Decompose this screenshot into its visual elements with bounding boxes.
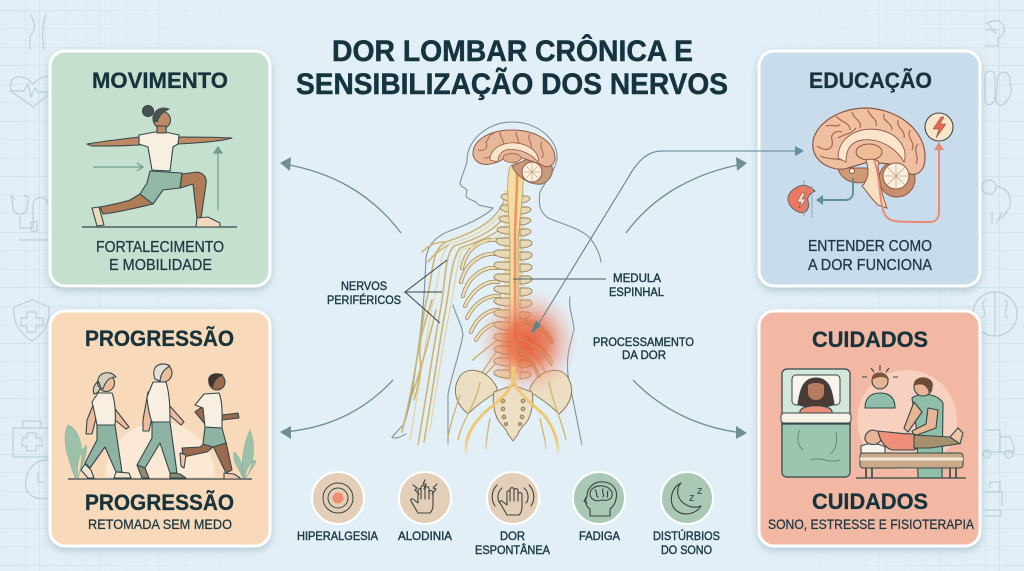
symptom: hiperalgesia: HIPERALGESIA (297, 531, 378, 543)
symptom: alodinia (398, 472, 452, 543)
spinal cord (508, 163, 523, 372)
icon: concentric target (312, 472, 364, 524)
illustration: sleep and physiotherapy (781, 365, 966, 478)
label: processamento da dor (593, 337, 694, 362)
illustration: brain and pain pathways (788, 108, 953, 222)
arrow: to movimento (280, 157, 401, 233)
pelvis (455, 370, 572, 441)
symptom: dor espontânea: ESPONTÂNEA (475, 544, 550, 557)
caption: educação (808, 238, 932, 274)
panel: cuidados (759, 311, 980, 546)
label: nervos periféricos (327, 260, 447, 323)
label: nervos periféricos: PERIFÉRICOS (327, 294, 401, 307)
peripheral nerves (402, 192, 553, 445)
title: DOR LOMBAR CRÔNICA E (332, 34, 693, 68)
sacral nerves (466, 368, 558, 452)
symptom: distúrbios do sono: DISTÚRBIOS (653, 530, 720, 543)
nerves in glow (515, 321, 552, 378)
arrow: to progressão (280, 380, 393, 439)
caption: cuidados (768, 489, 975, 532)
label: medula espinhal: ESPINHAL (609, 287, 665, 299)
label: nervos periféricos: NERVOS (341, 281, 387, 293)
heading: cuidados: CUIDADOS (812, 327, 928, 352)
title (296, 34, 728, 101)
symptom: distúrbios do sono: DO SONO (661, 545, 712, 557)
panel: progressão (50, 311, 270, 546)
caption: educação: ENTENDER COMO (808, 238, 932, 255)
icon: moon and zzz (661, 472, 713, 524)
heading: educação: EDUCAÇÃO (809, 68, 932, 93)
brain (473, 130, 555, 184)
icon: moon and zzz: z (697, 485, 702, 497)
arrow: to cuidados (633, 380, 747, 439)
heading: progressão: PROGRESSÃO (85, 326, 234, 351)
symptom: dor espontânea: DOR (500, 531, 525, 543)
caption: progressão: RETOMADA SEM MEDO (88, 516, 232, 532)
icon: moon and zzz: z (689, 492, 694, 504)
spinal column (504, 190, 524, 380)
symptom: hiperalgesia (297, 472, 378, 543)
ribs (461, 240, 552, 342)
caption: movimento: FORTALECIMENTO (96, 239, 224, 256)
symptom: alodinia: ALODINIA (398, 531, 452, 543)
title: SENSIBILIZAÇÃO DOS NERVOS (296, 67, 728, 101)
man (143, 392, 184, 431)
symptom: fadiga (573, 472, 625, 543)
caption: progressão: PROGRESSÃO (85, 490, 234, 515)
runner (195, 405, 239, 424)
panel: educação (759, 51, 980, 286)
label: processamento da dor: DA DOR (622, 350, 666, 362)
faint background icons: right (973, 21, 1017, 516)
central figure: spine and nerves (385, 122, 601, 460)
panel: movimento (50, 51, 270, 286)
symptom: distúrbios do sono (653, 472, 720, 557)
arrow: to educação (626, 157, 747, 233)
caption: progressão (85, 490, 234, 532)
icon: hand with waves (487, 472, 539, 524)
caption: educação: A DOR FUNCIONA (808, 257, 932, 274)
heading: movimento: MOVIMENTO (92, 68, 228, 93)
arrow: dor para educação (531, 146, 804, 333)
label: processamento da dor: PROCESSAMENTO (593, 337, 694, 349)
symptom: dor espontânea (475, 472, 550, 557)
pain glow (478, 290, 578, 394)
vertebrae (494, 194, 532, 379)
label: medula espinhal: MEDULA (613, 273, 661, 285)
illustration: walking figures (65, 364, 256, 479)
illustration: lunge figure (82, 106, 237, 227)
woman (86, 398, 129, 434)
caption: cuidados: CUIDADOS (812, 489, 928, 514)
faint background icons: left (9, 14, 54, 499)
symptom: fadiga: FADIGA (579, 531, 620, 543)
body outline (392, 122, 601, 445)
caption: movimento: E MOBILIDADE (109, 257, 212, 274)
label: medula espinhal (513, 273, 665, 299)
caption: movimento (96, 239, 224, 274)
caption: cuidados: SONO, ESTRESSE E FISIOTERAPIA (768, 516, 975, 532)
icon: head with brain (573, 472, 625, 524)
lower fade (385, 438, 595, 460)
icon: hand with sparks (399, 472, 451, 524)
